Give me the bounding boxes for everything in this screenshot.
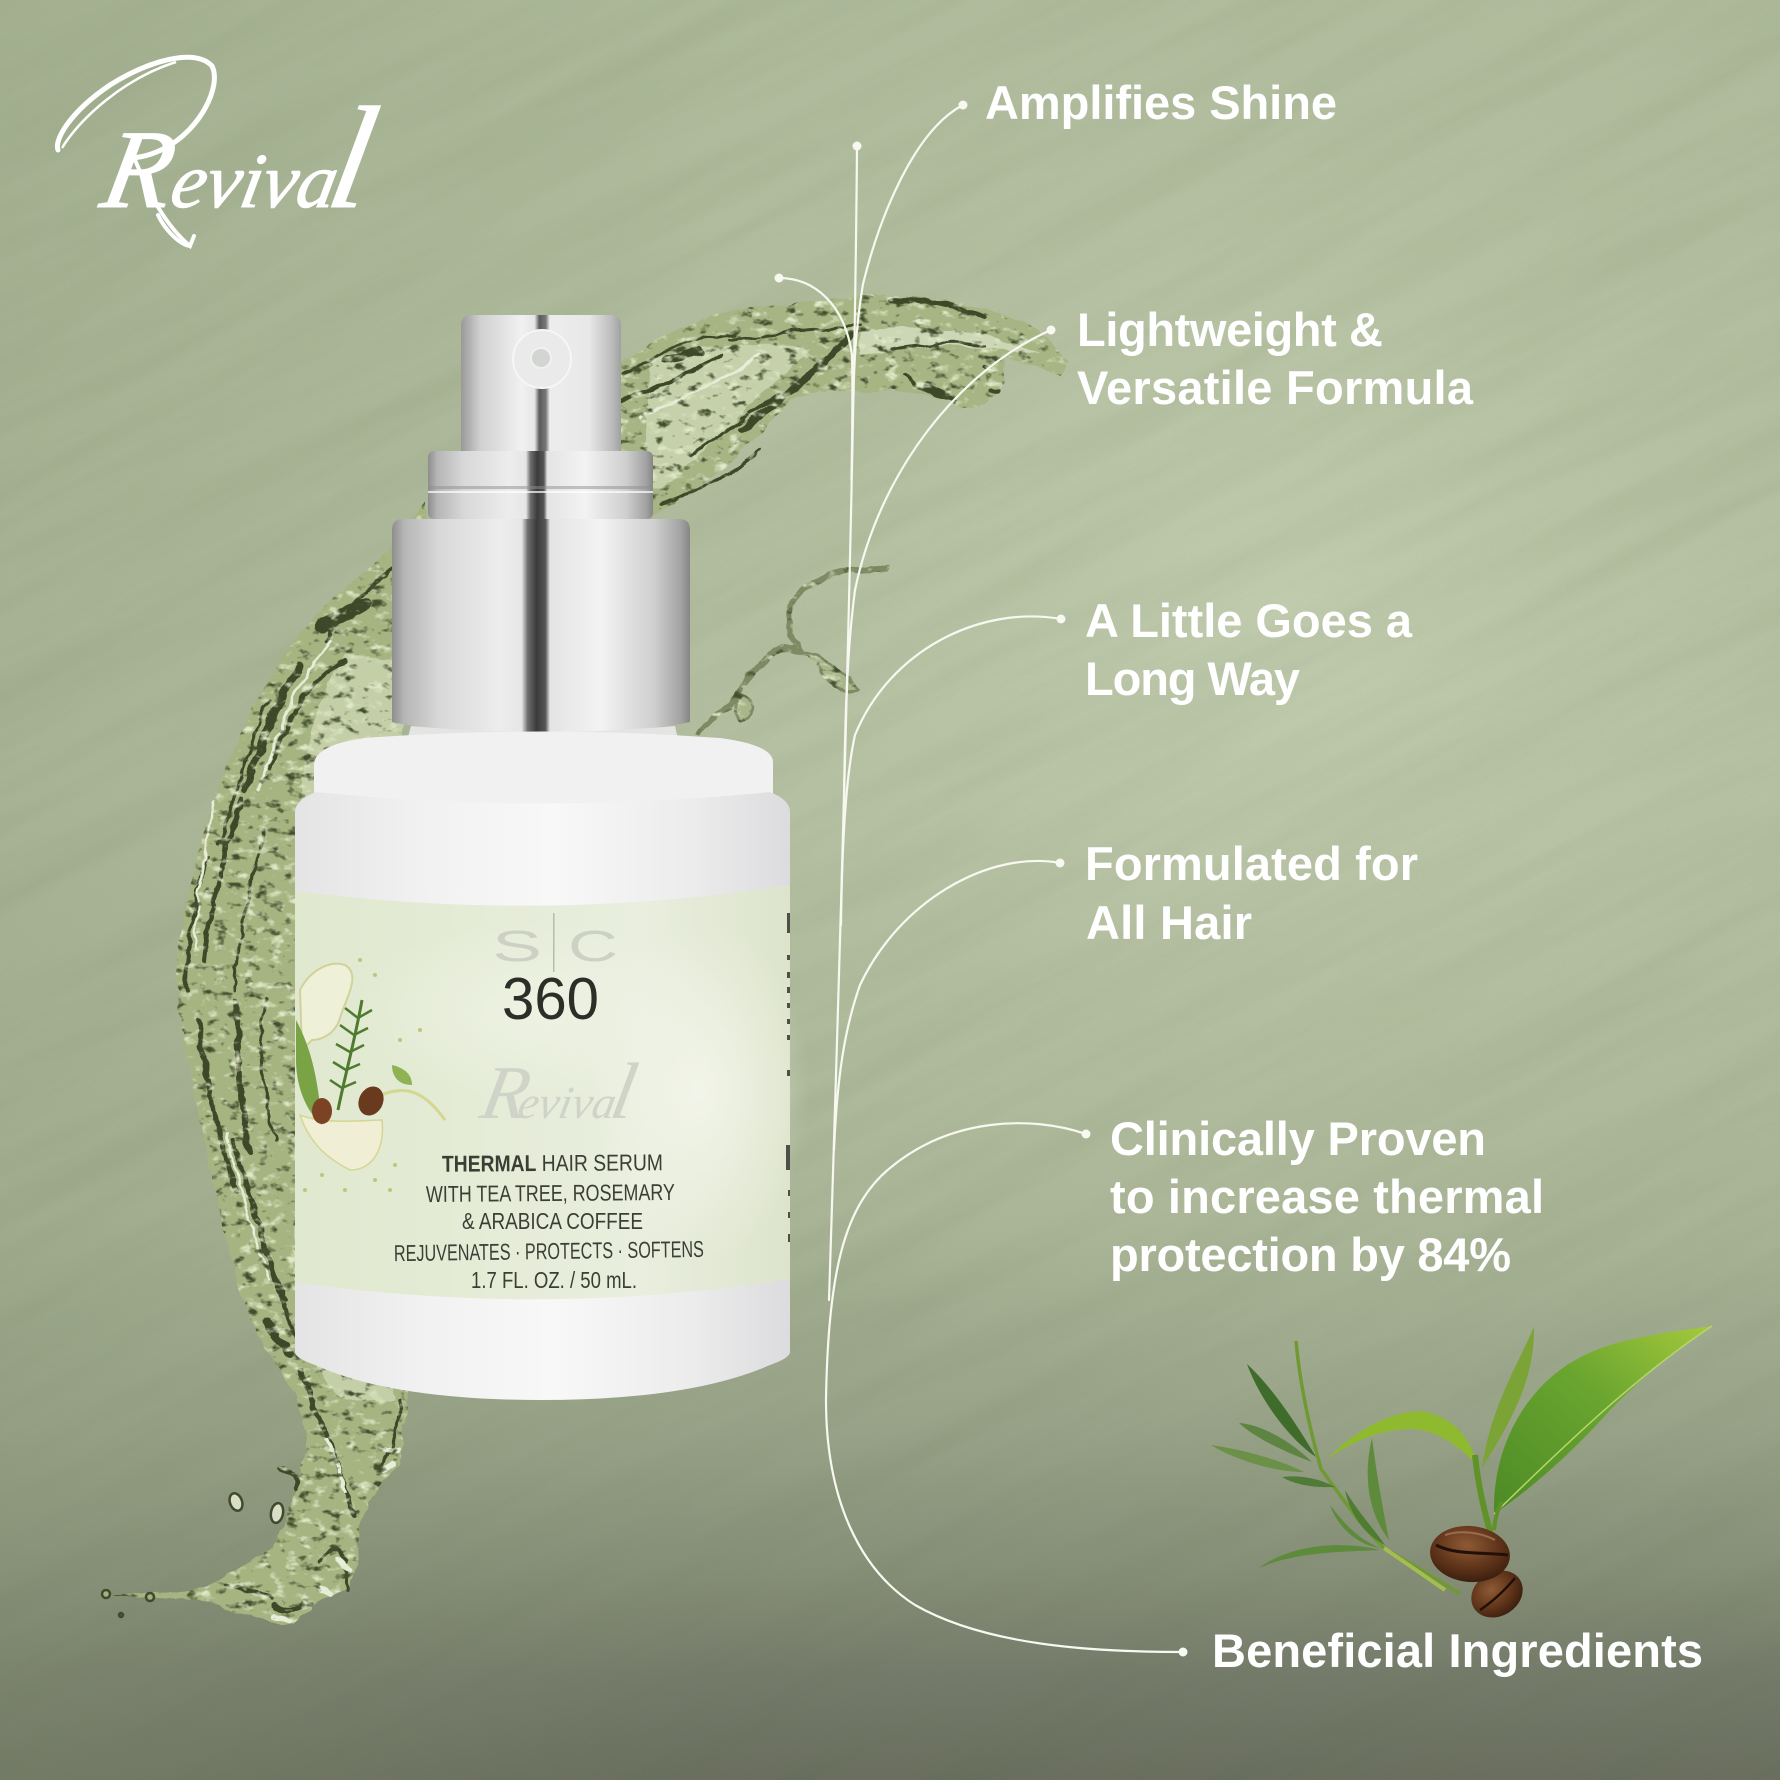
pump base <box>392 519 690 733</box>
label text block <box>394 1149 704 1293</box>
splash left arc <box>102 502 426 1625</box>
bottle shoulder <box>314 732 773 830</box>
line: main stem <box>829 146 857 1300</box>
label splash art <box>296 958 445 1192</box>
title: Revival script: R <box>92 108 186 232</box>
title: Revival script <box>57 57 389 246</box>
title: Revival script: l <box>317 77 389 239</box>
splash small curl <box>695 569 890 735</box>
feature: Beneficial Ingredients: Beneficial Ingredients <box>1212 1624 1703 1677</box>
feature: Clinically Proven: Clinically Proven <box>1110 1112 1486 1165</box>
label logo S|C: C <box>568 922 618 971</box>
feature: Formulated for All Hair: Formulated for <box>1085 837 1418 890</box>
label edge text marks <box>786 913 790 1242</box>
liquid splash <box>102 296 1066 1625</box>
feature: Clinically Proven: to increase thermal <box>1110 1170 1544 1223</box>
feature: Amplifies Shine: Amplifies Shine <box>985 76 1337 129</box>
feature: Formulated for All Hair <box>1085 837 1418 949</box>
label text block: 1.7 FL. OZ. / 50 mL. <box>471 1267 637 1293</box>
pump collar <box>428 451 653 519</box>
label text block: THERMAL HAIR SERUM <box>442 1149 663 1177</box>
feature: Clinically Proven: protection by 84% <box>1110 1228 1511 1281</box>
label script name: l <box>605 1048 644 1136</box>
rosemary sprig <box>1211 1341 1460 1594</box>
line: Lightweight <box>844 330 1051 800</box>
splash dark streaks <box>185 300 998 1610</box>
title: Revival script: eviva <box>165 139 346 225</box>
splash droplets <box>102 1491 285 1617</box>
line: Clinically Proven <box>826 1123 1086 1400</box>
coffee beans <box>1428 1523 1532 1627</box>
ingredients illustration <box>1211 1326 1712 1627</box>
splash inner light area <box>295 655 410 1400</box>
bottle neck <box>405 726 680 748</box>
line: Beneficial Ingredients <box>826 1400 1183 1652</box>
feature: A Little Goes a Long Way: A Little Goes a <box>1085 594 1413 647</box>
line: Formulated for All Hair <box>834 861 1060 1150</box>
splash highlights <box>195 355 760 1622</box>
label logo S|C: S <box>492 922 542 971</box>
line: Amplifies Shine <box>854 105 963 395</box>
bottle body <box>295 792 790 1400</box>
label text block: WITH TEA TREE, ROSEMARY <box>426 1179 675 1207</box>
label text block: REJUVENATES · PROTECTS · SOFTENS <box>394 1236 704 1266</box>
line: A Little Goes a Long Way <box>841 616 1061 925</box>
bottle <box>295 315 810 1400</box>
feature: A Little Goes a Long Way: Long Way <box>1085 652 1300 705</box>
feature: Lightweight & Versatile Formula <box>1077 303 1474 414</box>
line: upper-left branch <box>779 278 852 480</box>
label logo S|C <box>492 913 618 972</box>
callout dots <box>774 100 1188 1656</box>
feature: Lightweight & Versatile Formula: Versatile Formula <box>1077 361 1474 414</box>
feature: Clinically Proven <box>1110 1112 1544 1281</box>
label <box>295 885 810 1299</box>
label script name: eviva <box>514 1078 621 1129</box>
feature: Lightweight & Versatile Formula: Lightweight & <box>1077 303 1383 356</box>
callout lines <box>779 105 1183 1652</box>
tea leaves <box>1327 1326 1712 1535</box>
splash upper arc <box>600 296 1066 530</box>
feature: Formulated for All Hair: All Hair <box>1086 896 1252 949</box>
pump head <box>461 315 621 451</box>
label text block: & ARABICA COFFEE <box>462 1208 643 1234</box>
label logo 360: 360 <box>502 966 599 1032</box>
label script name: R <box>474 1051 538 1135</box>
feature: A Little Goes a Long Way <box>1085 594 1413 705</box>
